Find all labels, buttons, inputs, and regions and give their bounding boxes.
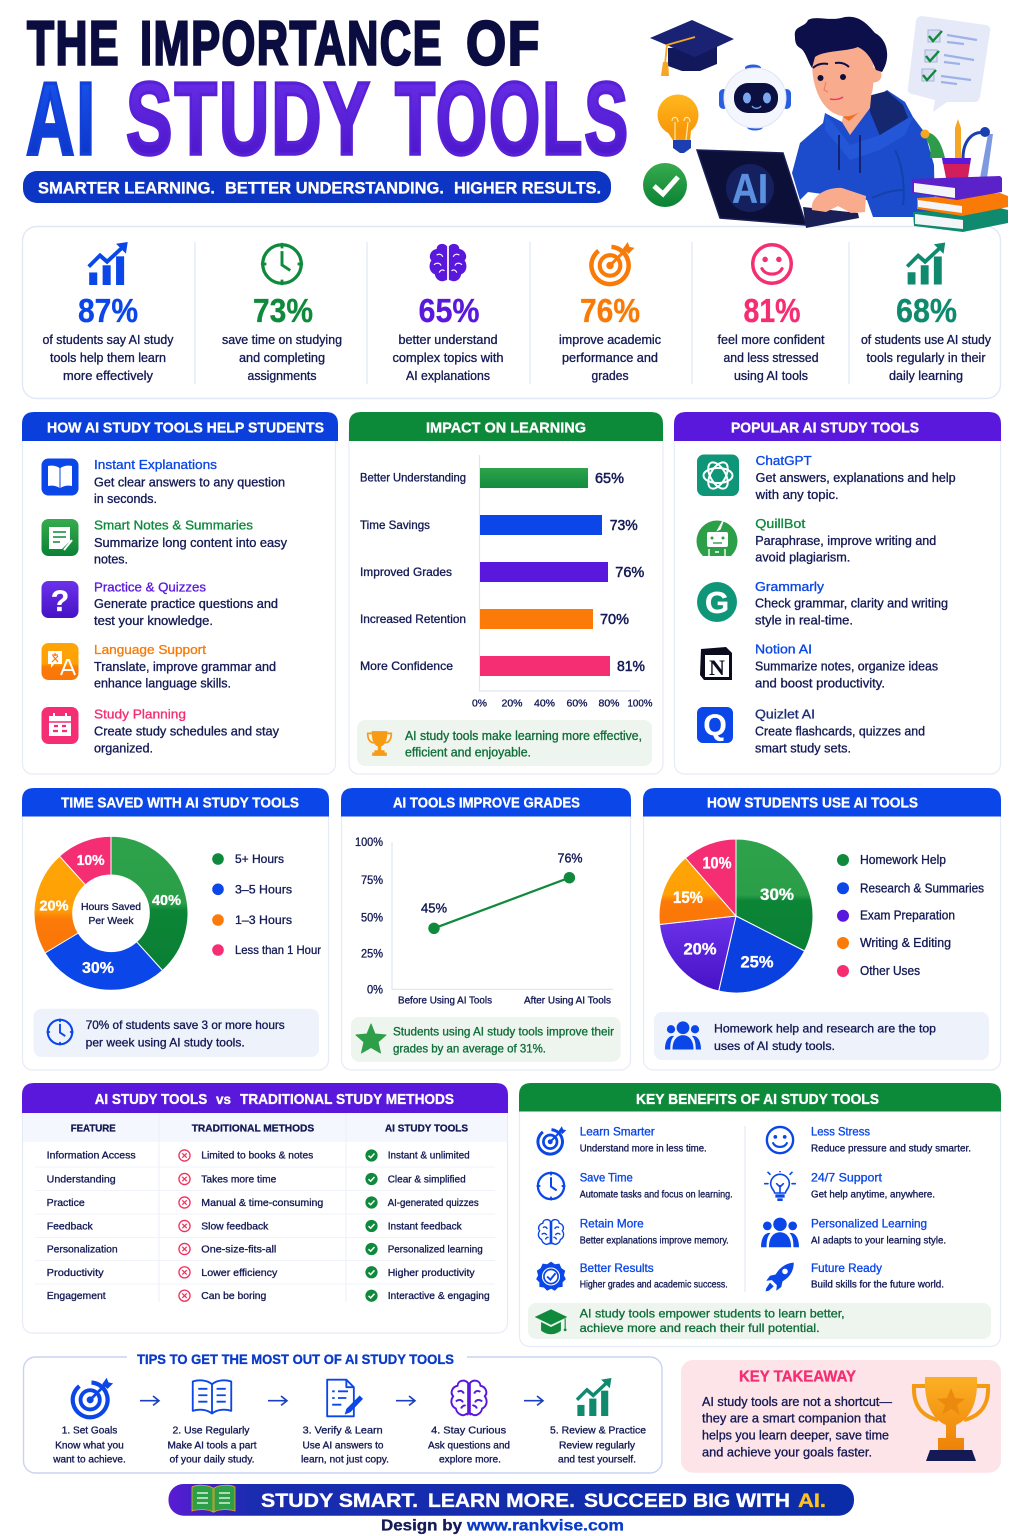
icon: graduation cap bbox=[650, 20, 734, 76]
text block: AI study tools are not a shortcut— bbox=[702, 1395, 892, 1409]
footer banner bbox=[168, 1484, 854, 1516]
stat: 87%: more effectively bbox=[63, 369, 154, 383]
panel: how AI study tools help students bbox=[22, 412, 338, 774]
callout: empower students: achieve more and reach their full potential. bbox=[580, 1321, 820, 1335]
heading bbox=[674, 412, 1001, 441]
item: practice and quizzes: Generate practice questions and bbox=[94, 597, 278, 611]
item: instant explanations: Instant Explanations bbox=[94, 457, 218, 472]
tool: Grammarly: G bbox=[705, 585, 729, 620]
table: TRADITIONAL METHODS bbox=[192, 1123, 314, 1135]
stat: 76%: 76% bbox=[580, 292, 640, 329]
heading: TIME SAVED WITH AI STUDY TOOLS bbox=[61, 796, 299, 812]
stat: 81% bbox=[718, 245, 825, 383]
row: personalization: Personalized learning bbox=[388, 1244, 483, 1256]
stat: 73%: and completing bbox=[239, 351, 325, 365]
callout: grades: Students using AI study tools improve their bbox=[393, 1025, 614, 1039]
heading: POPULAR AI STUDY TOOLS bbox=[731, 420, 919, 436]
donut chart bbox=[34, 836, 188, 990]
title: OF bbox=[466, 10, 541, 78]
benefit: retain more: Retain More bbox=[580, 1217, 644, 1231]
item: practice and quizzes: Practice & Quizzes bbox=[94, 580, 206, 594]
tagline pill bbox=[23, 171, 611, 203]
tip 2: use regularly: of your daily study. bbox=[170, 1454, 254, 1465]
tip 1: set goals: want to achieve. bbox=[52, 1454, 126, 1465]
row: engagement: Can be boring bbox=[201, 1290, 266, 1302]
tip 4: stay curious bbox=[428, 1381, 510, 1465]
line chart: After Using AI Tools bbox=[524, 995, 611, 1006]
row: understanding: Understanding bbox=[47, 1174, 116, 1186]
heading: KEY BENEFITS OF AI STUDY TOOLS bbox=[636, 1091, 879, 1108]
arrow bbox=[140, 1396, 159, 1405]
heading bbox=[22, 1083, 508, 1113]
callout: hours saved: 70% of students save 3 or more hours bbox=[86, 1018, 285, 1032]
benefit: 24/7 support: Get help anytime, anywhere. bbox=[811, 1190, 935, 1201]
title: TOOLS bbox=[395, 61, 630, 176]
footer banner: LEARN MORE. bbox=[428, 1491, 575, 1512]
legend: Homework Help bbox=[860, 853, 946, 867]
line chart: 45% bbox=[421, 901, 447, 916]
bar chart: 40% bbox=[534, 698, 555, 710]
stat: 81%: and less stressed bbox=[724, 351, 819, 365]
pie chart: 20% bbox=[684, 940, 717, 958]
icon: pencil cup and plant bbox=[920, 119, 993, 178]
item: study planning: Study Planning bbox=[94, 706, 186, 721]
tip 1: set goals: Know what you bbox=[55, 1441, 124, 1452]
legend bbox=[212, 852, 321, 957]
pie chart: 25% bbox=[740, 954, 774, 972]
benefit: less stress: Reduce pressure and study smarter. bbox=[811, 1144, 971, 1155]
benefit: less stress bbox=[767, 1125, 971, 1155]
title: THE bbox=[27, 10, 120, 78]
credit: www.rankvise.com bbox=[466, 1518, 624, 1534]
benefit: better results bbox=[536, 1261, 728, 1291]
benefit: future ready: Build skills for the future world. bbox=[811, 1279, 944, 1290]
bar chart: Improved Grades bbox=[360, 565, 452, 579]
item: smart notes: Summarize long content into easy bbox=[94, 536, 288, 550]
legend bbox=[837, 853, 984, 978]
line chart: 50% bbox=[361, 910, 383, 924]
tool: Quizlet AI: Quizlet AI bbox=[755, 706, 815, 721]
benefit: save time: Save Time bbox=[580, 1171, 633, 1185]
icon: checklist speech bubble bbox=[908, 16, 990, 112]
stat: 76%: performance and bbox=[562, 351, 658, 365]
item: practice and quizzes: test your knowledge. bbox=[94, 614, 213, 628]
stat: 73%: 73% bbox=[253, 292, 313, 329]
stat: 87%: of students say AI study bbox=[42, 333, 174, 347]
row: personalization: Personalization bbox=[47, 1244, 118, 1256]
donut chart: Per Week bbox=[88, 915, 134, 927]
bar chart: More Confidence bbox=[360, 659, 453, 673]
benefit: retain more bbox=[538, 1217, 729, 1247]
heading: AI TOOLS IMPROVE GRADES bbox=[393, 796, 580, 812]
item: language support: Translate, improve grammar and bbox=[94, 660, 276, 674]
callout: learning bbox=[357, 720, 652, 766]
stat: 65%: 65% bbox=[418, 292, 480, 329]
tagline pill: BETTER UNDERSTANDING. bbox=[225, 178, 444, 197]
stat: 76%: improve academic bbox=[559, 333, 661, 347]
bar chart: Better Understanding bbox=[360, 470, 466, 484]
stat: 76% bbox=[559, 240, 661, 383]
tip 4: stay curious: 4. Stay Curious bbox=[431, 1424, 506, 1436]
row: personalization: One-size-fits-all bbox=[201, 1244, 276, 1256]
tool: QuillBot: Paraphrase, improve writing and bbox=[755, 534, 936, 548]
callout: hours saved bbox=[34, 1009, 319, 1057]
callout: empower students: AI study tools empower students to learn better, bbox=[580, 1306, 845, 1320]
tip 2: use regularly: 2. Use Regularly bbox=[172, 1424, 250, 1436]
hero illustration bbox=[643, 16, 1008, 232]
benefit: better results: Higher grades and academic success. bbox=[580, 1279, 728, 1290]
callout: top uses bbox=[654, 1012, 989, 1060]
row: productivity: Lower efficiency bbox=[201, 1267, 278, 1279]
tool: Quizlet AI: Q bbox=[703, 709, 727, 742]
callout: hours saved: per week using AI study tools. bbox=[86, 1036, 245, 1050]
bar chart: 0% bbox=[472, 698, 487, 710]
item: study planning: organized. bbox=[94, 741, 153, 755]
tool: QuillBot bbox=[696, 516, 936, 564]
row: feedback: Instant feedback bbox=[388, 1220, 462, 1232]
row: feedback bbox=[47, 1220, 462, 1232]
row: feedback: Feedback bbox=[47, 1220, 93, 1232]
title: STUDY bbox=[126, 61, 372, 176]
row: understanding bbox=[47, 1173, 466, 1186]
panel: comparison table bbox=[22, 1083, 508, 1333]
heading: IMPACT ON LEARNING bbox=[426, 420, 586, 436]
benefit: 24/7 support bbox=[765, 1170, 935, 1201]
tool: Notion AI bbox=[700, 642, 938, 690]
row: information access bbox=[47, 1149, 470, 1162]
stat: 81%: 81% bbox=[744, 292, 800, 329]
footer banner: STUDY SMART. bbox=[261, 1491, 418, 1512]
benefit: personalized learning bbox=[761, 1217, 946, 1247]
footer banner: SUCCEED BIG WITH bbox=[584, 1491, 790, 1512]
donut chart: 30% bbox=[82, 960, 114, 977]
bar chart: 81% bbox=[617, 659, 645, 675]
legend: Exam Preparation bbox=[860, 909, 955, 923]
row: personalization bbox=[47, 1243, 483, 1256]
icon: laptop bbox=[697, 150, 866, 228]
benefit: personalized learning: Personalized Learning bbox=[811, 1217, 927, 1231]
callout: learning: AI study tools make learning more effective, bbox=[405, 729, 642, 743]
stat: 68%: of students use AI study bbox=[861, 333, 992, 347]
icon: book stack bbox=[912, 176, 1008, 232]
bar chart: 73% bbox=[610, 518, 638, 534]
panel: statistics bbox=[22, 226, 1000, 398]
tool: QuillBot: avoid plagiarism. bbox=[755, 550, 850, 564]
tip 1: set goals: 1. Set Goals bbox=[62, 1424, 117, 1436]
row: productivity bbox=[47, 1266, 475, 1279]
credit: Design by bbox=[381, 1518, 462, 1534]
tool: ChatGPT: ChatGPT bbox=[756, 453, 812, 468]
item: smart notes: Smart Notes & Summaries bbox=[94, 518, 254, 532]
line chart: 25% bbox=[361, 946, 383, 960]
heading: KEY TAKEAWAY bbox=[739, 1369, 857, 1386]
line chart bbox=[355, 835, 613, 1006]
row: productivity: Higher productivity bbox=[388, 1267, 475, 1279]
row: engagement bbox=[47, 1290, 490, 1302]
panel: key benefits bbox=[519, 1083, 1001, 1346]
line chart: 100% bbox=[355, 835, 383, 849]
item: practice and quizzes: ? bbox=[51, 585, 69, 618]
tool: ChatGPT: Get answers, explanations and help bbox=[756, 471, 956, 485]
callout: grades bbox=[351, 1017, 620, 1062]
row: feedback: Slow feedback bbox=[201, 1220, 269, 1232]
benefit: learn smarter: Learn Smarter bbox=[580, 1125, 655, 1139]
item: instant explanations bbox=[42, 457, 285, 506]
panel: impact on learning bbox=[349, 412, 663, 774]
bar chart bbox=[360, 455, 652, 710]
legend: Writing & Editing bbox=[860, 936, 951, 950]
tip 3: verify and learn: 3. Verify & Learn bbox=[303, 1424, 383, 1436]
tip 5: review and practice: 5. Review & Practice bbox=[550, 1424, 646, 1436]
tip 3: verify and learn bbox=[301, 1380, 389, 1465]
heading bbox=[22, 788, 329, 816]
benefit: future ready bbox=[766, 1261, 944, 1291]
pie chart bbox=[659, 839, 813, 993]
tool: Quizlet AI bbox=[697, 706, 925, 755]
item: language support: enhance language skills. bbox=[94, 676, 231, 690]
stat: 87%: tools help them learn bbox=[50, 351, 166, 365]
tip 3: verify and learn: learn, not just copy. bbox=[301, 1454, 389, 1465]
arrow bbox=[524, 1396, 543, 1405]
row: engagement: Interactive & engaging bbox=[388, 1290, 490, 1302]
line chart: 0% bbox=[367, 982, 383, 996]
legend: Research & Summaries bbox=[860, 881, 984, 895]
title bbox=[26, 10, 630, 176]
benefit: future ready: Future Ready bbox=[811, 1261, 882, 1275]
row: practice: Manual & time-consuming bbox=[201, 1197, 323, 1209]
stat: 76%: grades bbox=[592, 369, 628, 383]
icon: robot bbox=[719, 64, 791, 130]
callout: grades: grades by an average of 31%. bbox=[393, 1042, 546, 1056]
item: smart notes bbox=[42, 518, 288, 566]
bar chart: 80% bbox=[598, 698, 620, 710]
tip 5: review and practice: Review regularly bbox=[559, 1441, 635, 1452]
line chart: 76% bbox=[558, 851, 583, 866]
bar chart: 60% bbox=[566, 698, 588, 710]
tool: Notion AI: and boost productivity. bbox=[755, 676, 885, 690]
credit bbox=[381, 1518, 624, 1534]
tool: Notion AI: N bbox=[709, 655, 725, 680]
item: language support: Language Support bbox=[94, 642, 206, 657]
row: productivity: Productivity bbox=[47, 1267, 104, 1279]
icon: light bulb bbox=[658, 94, 698, 153]
bar chart: 100% bbox=[628, 698, 652, 710]
legend: Other Uses bbox=[860, 964, 920, 978]
bar chart: 70% bbox=[600, 612, 629, 628]
tool: Quizlet AI: Create flashcards, quizzes and bbox=[755, 724, 925, 738]
bar chart: 20% bbox=[502, 698, 522, 710]
icon: check badge bbox=[643, 163, 687, 207]
stat: 73%: save time on studying bbox=[222, 333, 342, 347]
item: practice and quizzes bbox=[42, 580, 278, 628]
donut chart: Hours Saved bbox=[81, 901, 141, 913]
stat: 68%: 68% bbox=[896, 292, 957, 329]
title: AI bbox=[26, 61, 97, 176]
tool: Grammarly: Grammarly bbox=[755, 579, 825, 594]
item: study planning: Create study schedules and stay bbox=[94, 725, 280, 739]
benefit: save time bbox=[537, 1171, 733, 1201]
stat: 81%: using AI tools bbox=[734, 369, 808, 383]
tool: Grammarly: style in real-time. bbox=[755, 613, 853, 627]
tip 5: review and practice: and test yourself. bbox=[558, 1454, 636, 1465]
stat: 68% bbox=[861, 242, 992, 383]
pie chart: 15% bbox=[673, 889, 703, 907]
heading bbox=[519, 1083, 1001, 1112]
line chart: Before Using AI Tools bbox=[398, 995, 492, 1006]
tip 4: stay curious: explore more. bbox=[439, 1454, 501, 1465]
legend: 3–5 Hours bbox=[235, 882, 292, 896]
tool: Notion AI: Notion AI bbox=[755, 642, 812, 657]
tip 2: use regularly: Make AI tools a part bbox=[168, 1441, 257, 1452]
tool: QuillBot: QuillBot bbox=[755, 516, 806, 531]
callout: learning: efficient and enjoyable. bbox=[405, 746, 531, 760]
benefit: 24/7 support: 24/7 Support bbox=[811, 1171, 883, 1185]
row: practice: Practice bbox=[47, 1197, 85, 1209]
stat: 68%: tools regularly in their bbox=[866, 351, 986, 365]
callout: top uses: Homework help and research are the top bbox=[714, 1021, 936, 1035]
arrow bbox=[396, 1396, 415, 1405]
panel: time saved bbox=[22, 788, 329, 1070]
benefit: retain more: Better explanations improve memory. bbox=[580, 1236, 729, 1247]
row: understanding: Takes more time bbox=[201, 1174, 276, 1186]
donut chart: 10% bbox=[77, 852, 105, 869]
tip 5: review and practice bbox=[550, 1378, 646, 1465]
stat: 87%: 87% bbox=[78, 292, 138, 329]
panel: grades bbox=[341, 788, 631, 1070]
row: practice: AI-generated quizzes bbox=[388, 1197, 479, 1209]
student with hoodie bbox=[792, 17, 935, 217]
legend: 5+ Hours bbox=[235, 852, 284, 866]
tip 3: verify and learn: Use AI answers to bbox=[302, 1441, 384, 1452]
heading: AI STUDY TOOLS bbox=[95, 1091, 207, 1108]
text block bbox=[702, 1395, 892, 1460]
tip 2: use regularly bbox=[168, 1380, 257, 1465]
bar chart: 76% bbox=[615, 565, 644, 581]
title: IMPORTANCE bbox=[140, 10, 443, 78]
heading bbox=[349, 412, 663, 441]
table: FEATURE bbox=[71, 1123, 116, 1135]
line chart: 75% bbox=[361, 873, 383, 887]
tool: ChatGPT bbox=[697, 453, 956, 502]
benefit: learn smarter: Understand more in less time. bbox=[580, 1144, 707, 1155]
item: smart notes: notes. bbox=[94, 552, 128, 566]
callout: top uses: uses of AI study tools. bbox=[714, 1039, 835, 1053]
tool: Quizlet AI: smart study sets. bbox=[755, 741, 851, 755]
icon: open book bbox=[192, 1485, 235, 1512]
legend: Less than 1 Hour bbox=[235, 943, 321, 957]
stat: 65%: better understand bbox=[398, 333, 498, 347]
pie chart: 30% bbox=[760, 886, 794, 904]
tool: Grammarly bbox=[697, 579, 948, 627]
item: instant explanations: in seconds. bbox=[94, 492, 157, 506]
row: information access: Instant & unlimited bbox=[388, 1150, 470, 1162]
item: language support bbox=[42, 642, 276, 690]
stat: 65%: AI explanations bbox=[406, 369, 490, 383]
bar chart: 65% bbox=[595, 471, 624, 487]
bar chart: Time Savings bbox=[360, 518, 430, 532]
stat: 81%: feel more confident bbox=[718, 333, 825, 347]
row: practice bbox=[47, 1196, 479, 1209]
tagline pill: SMARTER LEARNING. bbox=[38, 178, 215, 197]
heading bbox=[22, 412, 338, 441]
tip 4: stay curious: Ask questions and bbox=[428, 1441, 510, 1452]
table: AI STUDY TOOLS bbox=[385, 1123, 468, 1135]
icon: trophy bbox=[914, 1377, 988, 1461]
text block: they are a smart companion that bbox=[702, 1412, 887, 1426]
tool: Notion AI: Summarize notes, organize ideas bbox=[755, 659, 938, 673]
panel: popular AI study tools bbox=[674, 412, 1001, 774]
benefit: save time: Automate tasks and focus on learning. bbox=[580, 1190, 733, 1201]
panel: key takeaway bbox=[681, 1360, 1001, 1473]
legend: 1–3 Hours bbox=[235, 913, 292, 927]
row: engagement: Engagement bbox=[47, 1290, 106, 1302]
donut chart: 40% bbox=[152, 892, 181, 909]
heading bbox=[341, 788, 631, 816]
tool: Grammarly: Check grammar, clarity and writing bbox=[755, 597, 948, 611]
callout: empower students bbox=[528, 1303, 991, 1339]
heading: HOW STUDENTS USE AI TOOLS bbox=[707, 796, 918, 812]
tagline pill: HIGHER RESULTS. bbox=[454, 178, 601, 197]
panel: how students use AI tools bbox=[643, 788, 1001, 1070]
bar chart: Increased Retention bbox=[360, 612, 466, 626]
stat: 68%: daily learning bbox=[889, 369, 963, 383]
text block: and achieve your goals faster. bbox=[702, 1446, 872, 1460]
pie chart: 10% bbox=[702, 854, 732, 872]
stat: 65% bbox=[392, 244, 504, 383]
stat: 87% bbox=[42, 242, 174, 383]
stat: 73%: assignments bbox=[248, 369, 316, 383]
heading: TRADITIONAL STUDY METHODS bbox=[240, 1091, 454, 1108]
panel: tips bbox=[24, 1350, 662, 1473]
table bbox=[23, 1113, 507, 1302]
heading: TIPS TO GET THE MOST OUT OF AI STUDY TOOLS bbox=[137, 1352, 454, 1367]
arrow bbox=[268, 1396, 287, 1405]
benefit: better results: Better Results bbox=[580, 1261, 654, 1275]
benefit: personalized learning: AI adapts to your learning style. bbox=[811, 1236, 946, 1247]
benefit: learn smarter bbox=[533, 1125, 707, 1159]
text block: helps you learn deeper, save time bbox=[702, 1428, 889, 1442]
stat: 65%: complex topics with bbox=[392, 351, 504, 365]
stat: 73% bbox=[222, 243, 342, 383]
tip 1: set goals bbox=[52, 1376, 126, 1465]
heading: vs bbox=[216, 1091, 231, 1107]
item: study planning bbox=[42, 706, 280, 755]
footer banner: AI. bbox=[798, 1491, 826, 1512]
row: understanding: Clear & simplified bbox=[388, 1174, 466, 1186]
donut chart: 20% bbox=[40, 898, 68, 914]
row: information access: Limited to books & notes bbox=[201, 1150, 313, 1162]
benefit: less stress: Less Stress bbox=[811, 1125, 870, 1139]
heading bbox=[643, 788, 1001, 816]
icon: laptop: AI bbox=[732, 165, 768, 212]
heading: HOW AI STUDY TOOLS HELP STUDENTS bbox=[47, 420, 324, 436]
item: instant explanations: Get clear answers to any question bbox=[94, 476, 285, 490]
tool: ChatGPT: with any topic. bbox=[755, 488, 839, 502]
row: information access: Information Access bbox=[47, 1150, 136, 1162]
